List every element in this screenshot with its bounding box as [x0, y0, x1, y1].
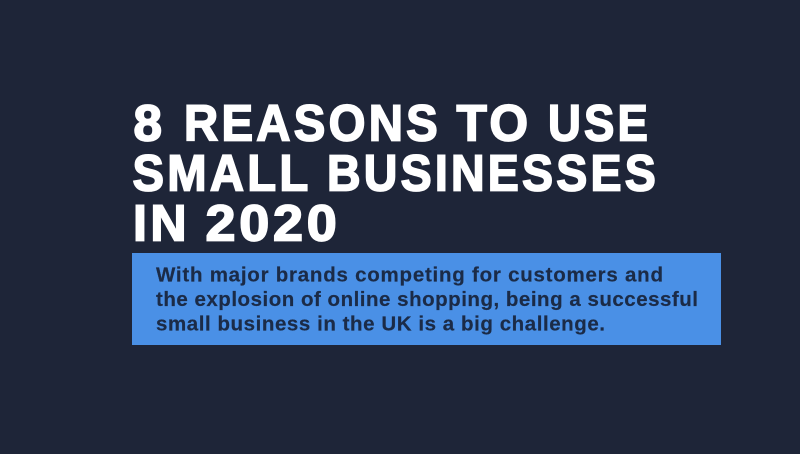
intro text: the explosion of online shopping, being a successful [156, 288, 698, 311]
title: 8 [134, 94, 166, 152]
intro text: With major brands competing for customers and [156, 264, 663, 286]
title: TO [456, 94, 532, 152]
title: REASONS [184, 94, 441, 152]
intro text [156, 264, 698, 336]
title: BUSINESSES [327, 144, 659, 202]
title: IN [133, 194, 190, 252]
title: 2020 [206, 194, 340, 252]
intro text: small business in the UK is a big challenge. [156, 312, 605, 336]
title: SMALL [132, 144, 312, 202]
title: USE [548, 94, 651, 152]
title [132, 94, 659, 252]
callout panel [132, 253, 721, 345]
